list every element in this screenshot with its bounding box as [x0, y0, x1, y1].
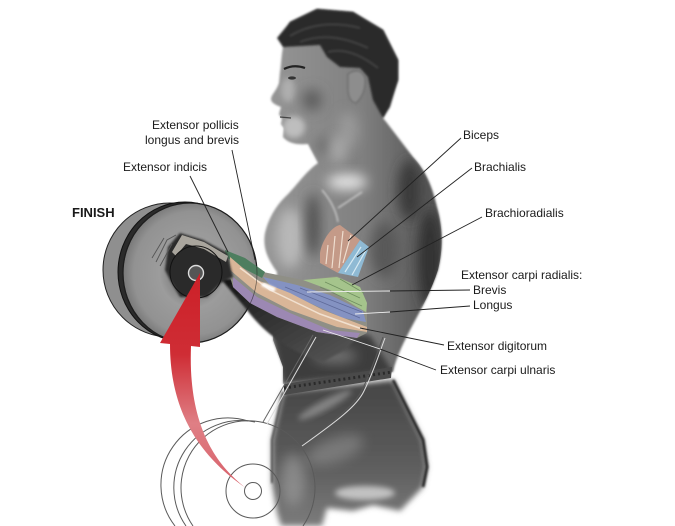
label: extensor carpi radialis: Longus: [473, 298, 512, 312]
muscle: brachioradialis: [303, 277, 367, 312]
waistband: [284, 367, 392, 395]
fist: [152, 233, 233, 298]
label: finish: FINISH: [72, 205, 115, 220]
label: extensor pollicis longus and brevis: longus and brevis: [145, 133, 239, 147]
start position ghost barbell: [161, 418, 315, 526]
hub circle: [170, 246, 222, 298]
label: extensor carpi radialis: Extensor carpi radialis:: [461, 268, 582, 282]
label: extensor carpi ulnaris: Extensor carpi ulnaris: [440, 363, 555, 377]
plate outline over forearm: [123, 203, 257, 343]
label: extensor pollicis longus and brevis: [145, 118, 239, 147]
forearm base: [222, 250, 367, 338]
infographic: [72, 7, 582, 526]
muscle: extensor digitorum tan: [230, 257, 367, 332]
forearm underside: [220, 278, 360, 362]
label: biceps: Biceps: [463, 128, 499, 142]
back barbell plate: [103, 203, 237, 337]
pants: [272, 380, 427, 526]
forearm: [220, 250, 367, 362]
dark plate rim: [118, 202, 252, 342]
face details: [280, 66, 305, 118]
ear: [348, 71, 365, 103]
hair: [277, 9, 398, 118]
label: extensor carpi radialis: [461, 268, 582, 312]
face shading: [283, 116, 305, 138]
torso, neck and head silhouette: [264, 9, 442, 384]
start position ghost forearm lines: [263, 335, 385, 446]
shoulder shading: [327, 174, 367, 190]
front barbell plate: [123, 203, 257, 343]
muscle: extensor indicis green: [225, 250, 265, 278]
finger lines: [152, 235, 176, 266]
muscle: extensor carpi ulnaris purple: [233, 277, 360, 338]
leader lines: [190, 138, 482, 370]
label: extensor carpi radialis: Brevis: [473, 283, 506, 297]
red motion arrow: [160, 273, 246, 488]
abdomen shading: [273, 332, 394, 384]
biceps: [320, 225, 360, 273]
label: extensor pollicis longus and brevis: Extensor pollicis: [152, 118, 239, 132]
brachialis: [338, 240, 369, 277]
grip ring: [188, 266, 204, 280]
label: brachialis: Brachialis: [474, 160, 526, 174]
muscle: extensor carpi radialis blue: [263, 277, 366, 322]
label: brachioradialis: Brachioradialis: [485, 206, 564, 220]
label: extensor digitorum: Extensor digitorum: [447, 339, 547, 353]
label: extensor indicis: Extensor indicis: [123, 160, 207, 174]
